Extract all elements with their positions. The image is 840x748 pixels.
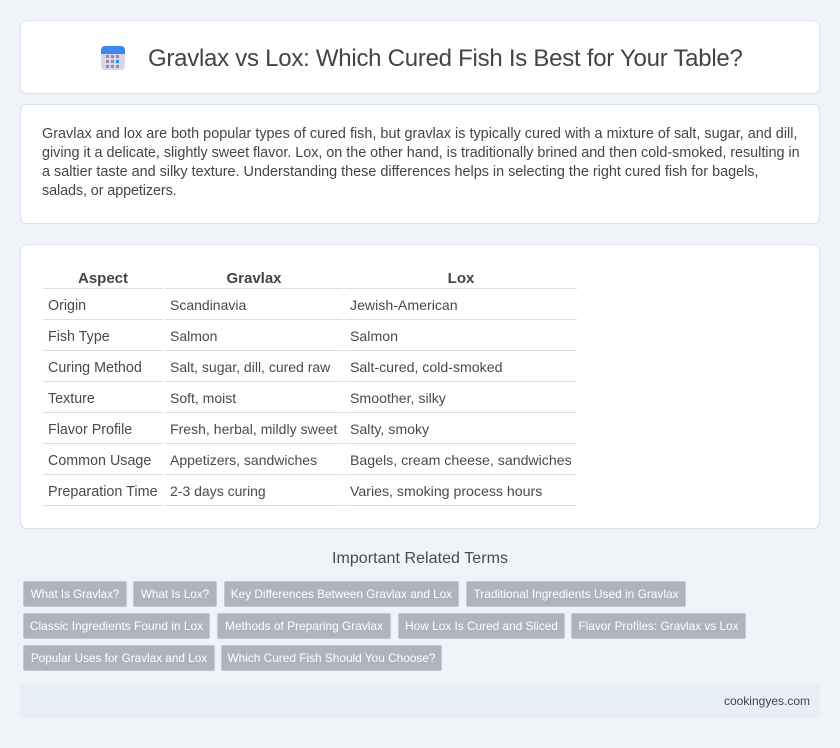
tag list [23,581,746,671]
row: Fish Type: Salmon [170,328,217,344]
row: Preparation Time [48,483,542,500]
row: Texture [48,390,446,407]
row: Curing Method [48,359,502,376]
header panel [20,20,820,94]
row: Fish Type: Salmon [350,328,398,344]
tag [133,581,217,607]
row: Fish Type [48,328,398,345]
row: Curing Method: Salt-cured, cold-smoked [350,359,502,375]
tag [571,613,746,639]
tag: What Is Gravlax? [31,589,119,601]
tag: How Lox Is Cured and Sliced [405,619,558,633]
heading: Important Related Terms: Important Related Terms [332,550,508,567]
tag: What Is Lox? [141,588,209,601]
tag: Flavor Profiles: Gravlax vs Lox [579,619,738,633]
header: Aspect: Aspect [78,270,128,287]
comparison table [43,268,577,506]
row: Fish Type: Fish Type [48,329,110,345]
row: Origin: Scandinavia [170,297,246,313]
tag [466,581,686,607]
row: Curing Method: Salt, sugar, dill, cured raw [170,359,330,375]
tag [23,613,210,639]
tag [23,645,215,671]
tag [224,581,459,607]
tag: Classic Ingredients Found in Lox [30,619,203,633]
row: Preparation Time: Preparation Time [48,484,158,500]
footer credit: cookingyes.com [724,694,810,708]
row: Flavor Profile [48,421,429,438]
header: Lox: Lox [448,270,474,287]
row: Texture: Texture [48,391,95,407]
tag: Methods of Preparing Gravlax [225,619,383,633]
row: Common Usage: Appetizers, sandwiches [170,452,317,468]
intro text: a saltier taste and silky texture. Understanding these differences helps in selecting the right cured fish for bagels, [42,164,758,180]
row: Preparation Time: Varies, smoking process hours [350,483,542,499]
row: Flavor Profile: Salty, smoky [350,421,429,437]
tag [217,613,391,639]
icon: calendar [101,46,125,70]
tag [221,645,442,671]
row: Origin: Jewish-American [350,297,458,313]
header: Gravlax: Gravlax [226,270,282,287]
row: Flavor Profile: Flavor Profile [48,422,132,438]
intro text: Gravlax and lox are both popular types of cured fish, but gravlax is typically cured with a mixture of salt, sugar, and dill, [42,126,797,142]
panel: intro paragraph [20,104,820,224]
intro text: salads, or appetizers. [42,183,177,199]
panel: comparison table [20,244,820,529]
tag: Key Differences Between Gravlax and Lox [231,587,452,601]
tag [23,581,127,607]
tag [398,613,565,639]
tag: Popular Uses for Gravlax and Lox [31,652,207,665]
footer bar [20,684,820,718]
row: Common Usage: Common Usage [48,453,151,469]
tag: Traditional Ingredients Used in Gravlax [473,587,679,601]
row: Origin: Origin [48,298,86,314]
row: Curing Method: Curing Method [48,360,142,376]
row: Origin [48,297,458,314]
intro text: giving it a delicate, slightly sweet flavor. Lox, on the other hand, is traditionally brined and then cold-smoked, resulting in [42,145,800,161]
row: Flavor Profile: Fresh, herbal, mildly sweet [170,421,337,437]
row: Texture: Smoother, silky [350,390,446,406]
row: Common Usage: Bagels, cream cheese, sandwiches [350,452,572,468]
row: Common Usage [48,452,572,469]
title: Gravlax vs Lox: Which Cured Fish Is Best for Your Table? [148,45,743,72]
row: Texture: Soft, moist [170,390,236,406]
tag: Which Cured Fish Should You Choose? [227,651,436,665]
intro text [42,126,800,199]
row: Preparation Time: 2-3 days curing [170,483,266,499]
